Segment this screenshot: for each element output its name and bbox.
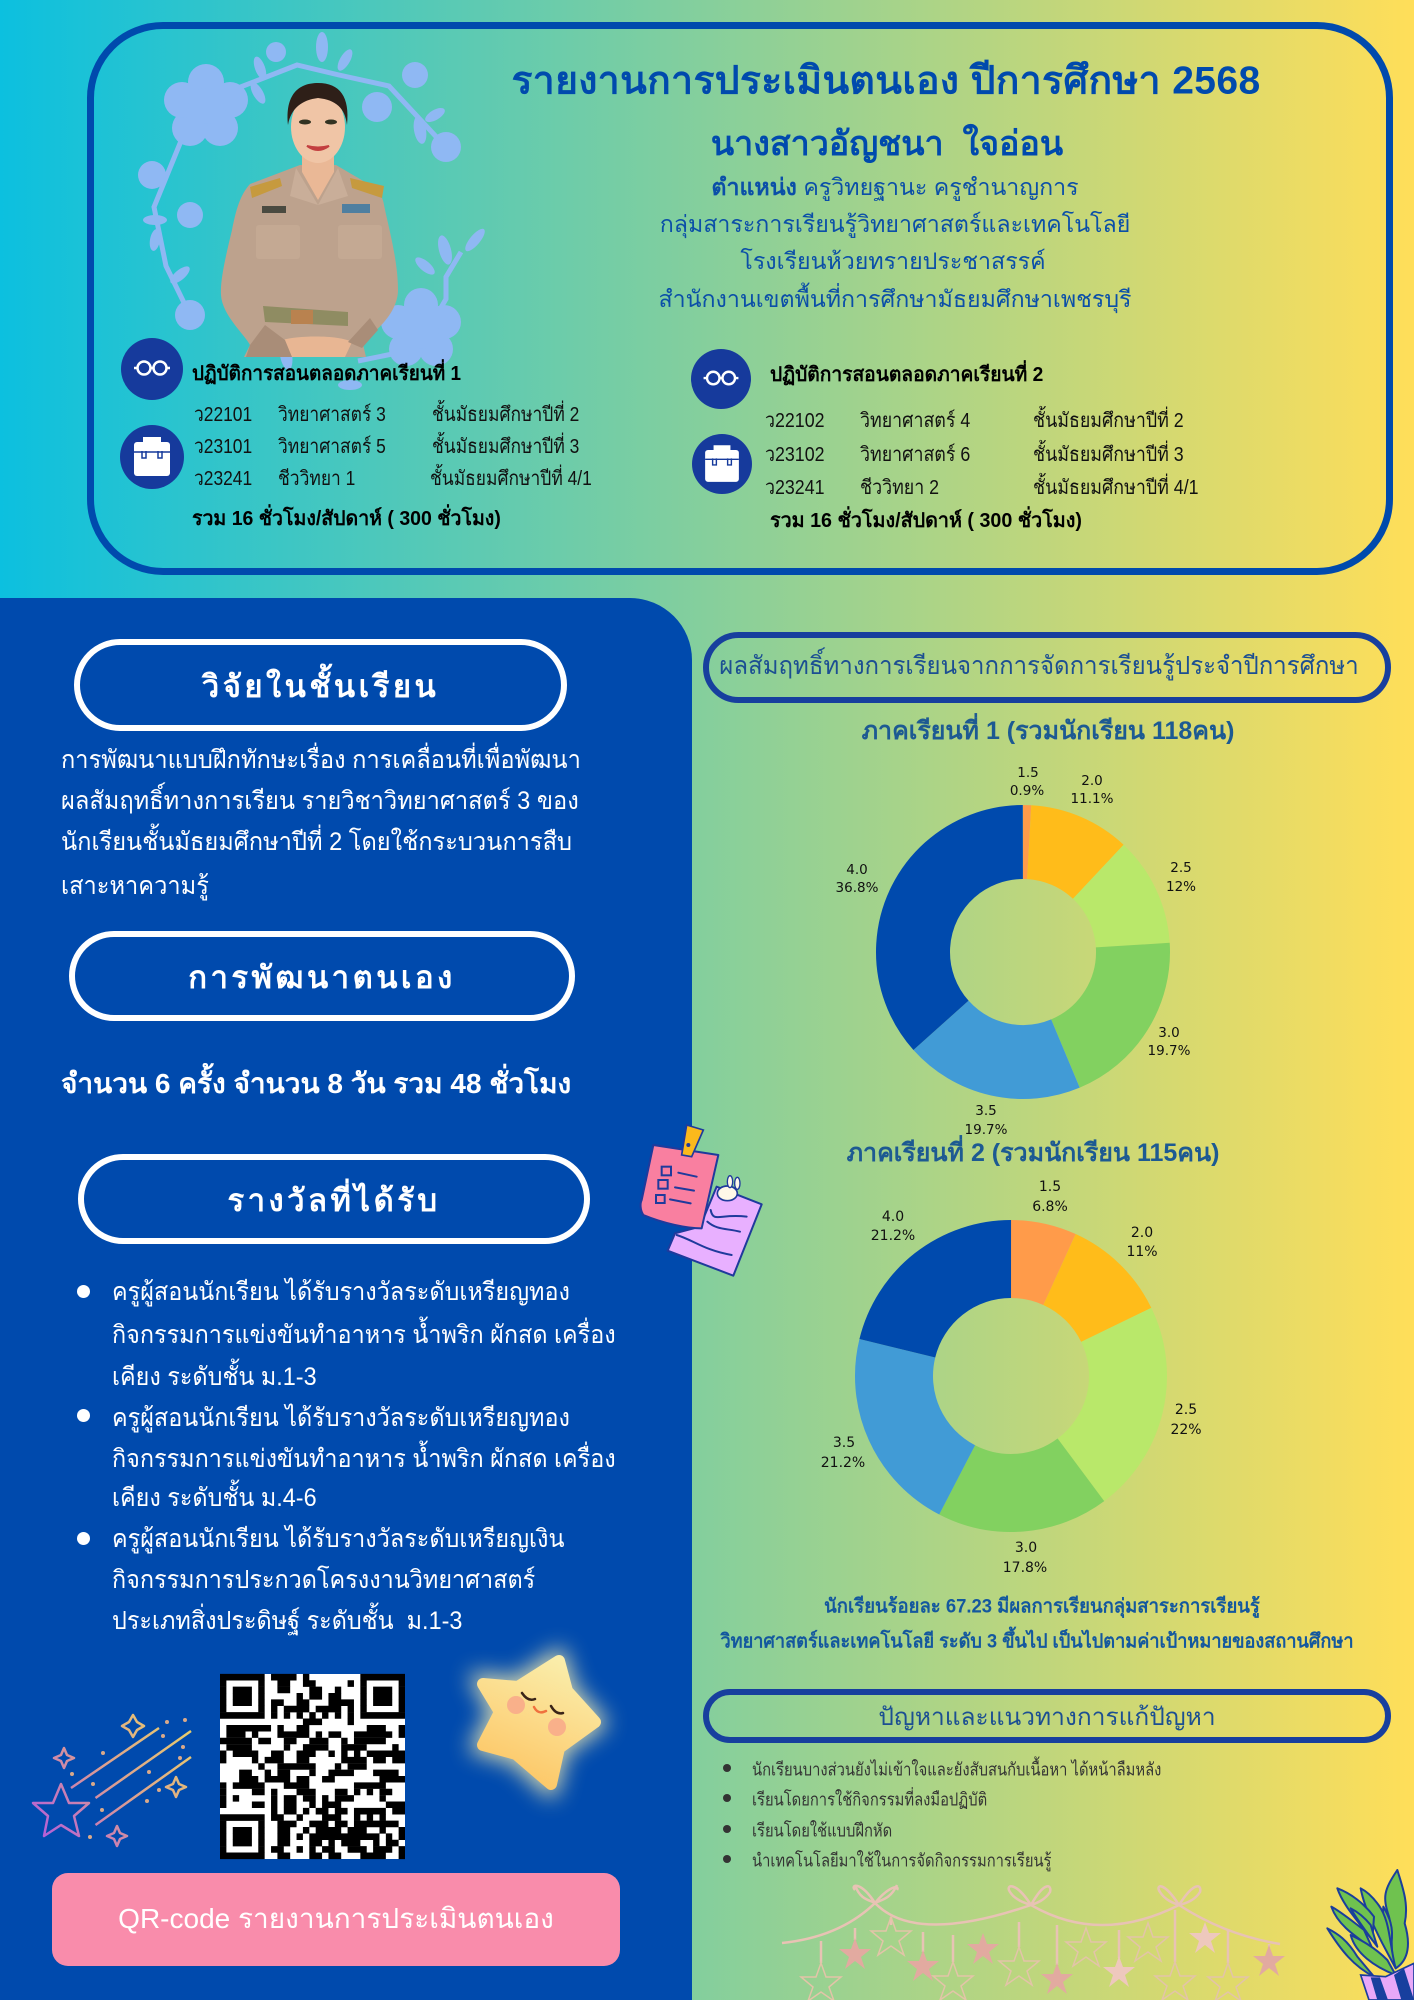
list: awards received: กิจกรรมการประกวดโครงงานวิทยาศาสตร์ (112, 1566, 535, 1594)
text: development totals: จำนวน 6 ครั้ง จำนวน 8 วัน รวม 48 ชั่วโมง (61, 1068, 571, 1099)
heading pill: problems and solutions (703, 1689, 1391, 1743)
chart: semester 2 donut: 4.0 (882, 1209, 904, 1225)
list: problems and solutions: นำเทคโนโลยีมาใช้ในการจัดกิจกรรมการเรียนรู้ (752, 1850, 1051, 1870)
icon: star garland (782, 1884, 1285, 2000)
list: awards received: ครูผู้สอนนักเรียน ได้รับรางวัลระดับเหรียญเงิน (112, 1525, 564, 1553)
icon: glasses semester 2 (691, 349, 751, 409)
chart: semester 2 donut: 21.2% (821, 1455, 865, 1471)
semester 1 teaching load: ชีววิทยา 1 (278, 468, 355, 490)
semester 1 teaching load: ชั้นมัธยมศึกษาปีที่ 2 (432, 404, 579, 426)
heading pill: self development (69, 931, 575, 1021)
list: awards received: ครูผู้สอนนักเรียน ได้รับรางวัลระดับเหรียญทอง (112, 1404, 570, 1432)
icon: bag semester 2 (692, 434, 752, 494)
list: problems and solutions (723, 1756, 1161, 1872)
chart: semester 1 donut: 19.7% (965, 1122, 1008, 1138)
chart: semester 2 donut: 3.0 (1015, 1540, 1037, 1556)
text: research description: ผลสัมฤทธิ์ทางการเรียน รายวิชาวิทยาศาสตร์ 3 ของ (61, 787, 579, 815)
text: target summary (720, 1595, 1354, 1652)
semester 1 teaching load: ว23241 (194, 468, 252, 490)
list: awards received (77, 1278, 616, 1636)
semester 1 teaching load: ว23101 (194, 436, 252, 458)
list: problems and solutions: เรียนโดยใช้แบบฝึกหัด (752, 1820, 892, 1840)
chart: semester 2 donut: 3.5 (833, 1435, 855, 1451)
semester 2 teaching load: วิทยาศาสตร์ 6 (860, 444, 970, 466)
chart: semester 2 donut: 1.5 (1039, 1179, 1061, 1195)
chart: semester 1 donut (836, 765, 1196, 1138)
text: research description: นักเรียนชั้นมัธยมศึกษาปีที่ 2 โดยใช้กระบวนการสืบ (61, 828, 572, 856)
semester 2 teaching load: ปฏิบัติการสอนตลอดภาคเรียนที่ 2 (770, 364, 1043, 386)
icon: bag semester 1 (120, 425, 184, 489)
chart: semester 2 donut: 2.0 (1131, 1225, 1153, 1241)
QR code (220, 1674, 405, 1860)
text: target summary: นักเรียนร้อยละ 67.23 มีผลการเรียนกลุ่มสาระการเรียนรู้ (824, 1595, 1260, 1617)
heading pill: awards (78, 1154, 590, 1244)
heading: semester 1 chart: ภาคเรียนที่ 1 (รวมนักเรียน 118คน) (862, 717, 1234, 745)
icon: smiling star (456, 1634, 620, 1812)
list: awards received: กิจกรรมการแข่งขันทำอาหาร น้ำพริก ผักสด เครื่อง (112, 1445, 616, 1473)
icon: sticky notes (640, 1124, 763, 1277)
position and affiliation text: โรงเรียนห้วยทรายประชาสรรค์ (740, 248, 1046, 274)
semester 2 teaching load: วิทยาศาสตร์ 4 (860, 410, 970, 432)
chart: semester 1 donut: 2.5 (1170, 860, 1192, 876)
text: research description: การพัฒนาแบบฝึกทักษะเรื่อง การเคลื่อนที่เพื่อพัฒนา (61, 746, 581, 774)
semester 2 teaching load: ชั้นมัธยมศึกษาปีที่ 3 (1033, 444, 1184, 466)
semester 1 teaching load: ว22101 (194, 404, 252, 426)
teacher name: นางสาวอัญชนา ใจอ่อน (711, 125, 1063, 163)
semester 2 teaching load: รวม 16 ชั่วโมง/สัปดาห์ ( 300 ชั่วโมง) (770, 510, 1082, 532)
chart: semester 1 donut: 19.7% (1148, 1043, 1191, 1059)
heading pill: learning results (703, 632, 1391, 703)
chart: semester 2 donut: 21.2% (871, 1228, 915, 1244)
semester 1 teaching load: วิทยาศาสตร์ 3 (278, 404, 386, 426)
semester 2 teaching load: ว22102 (765, 410, 825, 432)
list: awards received: ครูผู้สอนนักเรียน ได้รับรางวัลระดับเหรียญทอง (112, 1278, 570, 1306)
semester 1 teaching load: ปฏิบัติการสอนตลอดภาคเรียนที่ 1 (192, 363, 461, 385)
heading pill: self development: การพัฒนาตนเอง (188, 960, 456, 995)
chart: semester 1 donut: 1.5 (1017, 765, 1039, 781)
text: research description: เสาะหาความรู้ (61, 872, 209, 900)
icon: floral wreath (138, 32, 485, 390)
chart: semester 1 donut: 4.0 (846, 862, 868, 878)
list: awards received: ประเภทสิ่งประดิษฐ์ ระดับชั้น ม.1-3 (112, 1607, 462, 1635)
icon: shooting stars (32, 1714, 192, 1848)
chart: semester 2 donut: 22% (1170, 1422, 1202, 1438)
semester 2 teaching load: ว23241 (765, 477, 825, 499)
heading: semester 2 chart: ภาคเรียนที่ 2 (รวมนักเรียน 115คน) (847, 1139, 1219, 1167)
chart: semester 1 donut: 12% (1166, 879, 1196, 895)
semester 2 teaching load: ชั้นมัธยมศึกษาปีที่ 2 (1033, 410, 1184, 432)
heading pill: learning results: ผลสัมฤทธิ์ทางการเรียนจากการจัดการเรียนรู้ประจำปีการศึกษา (719, 651, 1359, 679)
text: target summary: วิทยาศาสตร์และเทคโนโลยี ระดับ 3 ขึ้นไป เป็นไปตามค่าเป้าหมายของสถานศึกษา (720, 1630, 1354, 1652)
semester 1 teaching load (192, 359, 592, 530)
chart: semester 2 donut: 6.8% (1032, 1199, 1068, 1215)
title: รายงานการประเมินตนเอง ปีการศึกษา 2568 (511, 60, 1261, 103)
button: QR-code label: QR-code รายงานการประเมินตนเอง (118, 1902, 554, 1933)
list: awards received: กิจกรรมการแข่งขันทำอาหาร น้ำพริก ผักสด เครื่อง (112, 1321, 616, 1349)
position and affiliation text: ตำแหน่ง ครูวิทยฐานะ ครูชำนาญการ (711, 174, 1079, 200)
chart: semester 1 donut: 36.8% (836, 880, 879, 896)
icon: potted plant (1326, 1869, 1414, 2000)
text: research description (61, 742, 581, 900)
icon: glasses semester 1 (121, 338, 183, 400)
heading pill: problems and solutions: ปัญหาและแนวทางการแก้ปัญหา (878, 1704, 1216, 1731)
panel: left blue background (0, 598, 692, 2000)
panel: header frame (87, 22, 1393, 575)
heading pill: classroom research (74, 639, 567, 731)
chart: semester 1 donut: 3.0 (1158, 1025, 1180, 1041)
semester 1 teaching load: ชั้นมัธยมศึกษาปีที่ 4/1 (430, 468, 592, 490)
chart: semester 1 donut: 11.1% (1071, 791, 1114, 807)
chart: semester 2 donut: 17.8% (1003, 1560, 1047, 1576)
semester 2 teaching load (765, 360, 1199, 532)
semester 2 teaching load: ชั้นมัธยมศึกษาปีที่ 4/1 (1033, 477, 1199, 499)
list: awards received: เคียง ระดับชั้น ม.4-6 (112, 1484, 317, 1512)
semester 1 teaching load: ชั้นมัธยมศึกษาปีที่ 3 (432, 436, 579, 458)
chart: semester 2 donut: 11% (1126, 1244, 1158, 1260)
position and affiliation text: สำนักงานเขตพื้นที่การศึกษามัธยมศึกษาเพชรบุรี (658, 286, 1132, 312)
semester 1 teaching load: รวม 16 ชั่วโมง/สัปดาห์ ( 300 ชั่วโมง) (192, 508, 501, 530)
semester 2 teaching load: ว23102 (765, 444, 825, 466)
position and affiliation text: กลุ่มสาระการเรียนรู้วิทยาศาสตร์และเทคโนโลยี (660, 211, 1130, 237)
chart: semester 2 donut: 2.5 (1175, 1402, 1197, 1418)
list: awards received: เคียง ระดับชั้น ม.1-3 (112, 1363, 317, 1391)
chart: semester 1 donut: 3.5 (975, 1103, 997, 1119)
heading pill: classroom research: วิจัยในชั้นเรียน (202, 669, 439, 704)
button: QR-code label (52, 1873, 620, 1966)
position and affiliation text (658, 174, 1132, 314)
chart: semester 1 donut: 2.0 (1081, 773, 1103, 789)
chart: semester 2 donut (821, 1179, 1202, 1576)
chart: semester 1 donut: 0.9% (1010, 783, 1044, 799)
semester 1 teaching load: วิทยาศาสตร์ 5 (278, 436, 386, 458)
photo: teacher portrait (220, 83, 398, 357)
semester 2 teaching load: ชีววิทยา 2 (860, 477, 939, 499)
heading pill: awards: รางวัลที่ได้รับ (227, 1183, 441, 1218)
list: problems and solutions: นักเรียนบางส่วนยังไม่เข้าใจและยังสับสนกับเนื้อหา ได้หน้าลืมหลัง (752, 1759, 1161, 1779)
list: problems and solutions: เรียนโดยการใช้กิจกรรมที่ลงมือปฏิบัติ (752, 1789, 987, 1809)
